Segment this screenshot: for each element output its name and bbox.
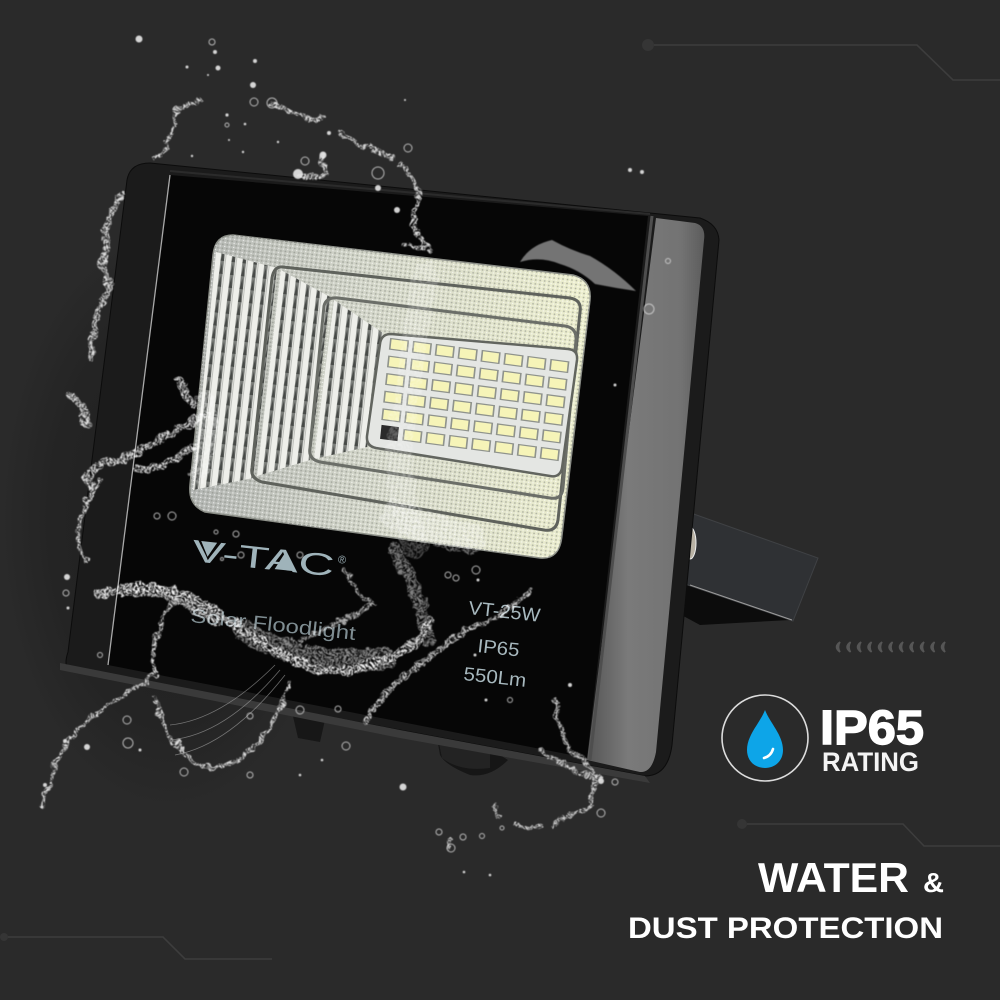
IP65 badge xyxy=(722,695,924,781)
circuit line: bottom left xyxy=(0,933,272,959)
floodlight mounting bracket xyxy=(676,512,818,625)
icon: water drop xyxy=(747,710,783,768)
heading: water: WATER xyxy=(758,854,909,901)
drop highlight xyxy=(764,749,773,758)
circuit line: top right xyxy=(642,39,1000,80)
water veil over reflector xyxy=(198,275,470,545)
cable plug under the body xyxy=(292,712,325,742)
IP65 label: IP65 xyxy=(820,702,924,755)
glass print: V-TAC logo xyxy=(190,533,347,585)
side strip xyxy=(587,218,704,772)
top rim xyxy=(170,171,650,214)
heading: water: & xyxy=(923,867,944,898)
floodlight body xyxy=(60,163,719,783)
outer housing xyxy=(66,163,719,776)
chevron row xyxy=(836,642,945,652)
glass print: rating: IP65 xyxy=(476,636,520,662)
LED grid xyxy=(380,339,569,462)
glass print: product name: Solar Floodlight xyxy=(189,605,358,645)
top and bottom facet texture xyxy=(190,235,590,558)
water splash: main lower sweep xyxy=(42,550,530,805)
glass right edge xyxy=(590,216,652,760)
bracket screw xyxy=(684,527,696,559)
reflector xyxy=(190,235,590,558)
bottom edge band xyxy=(60,663,650,783)
left facet inner xyxy=(314,300,383,459)
glass print: V-TAC logo: V-TAC xyxy=(190,533,336,583)
inner glass xyxy=(108,175,648,758)
left facet outer xyxy=(193,252,277,490)
water splash: lower right dribble xyxy=(446,700,600,850)
cable gland under the body xyxy=(437,738,508,775)
LED board xyxy=(367,334,577,476)
glass left highlight xyxy=(108,175,170,665)
water splash: upper left edge xyxy=(91,195,122,358)
RATING label: RATING xyxy=(822,747,919,777)
badge ring xyxy=(722,695,808,781)
drop shadow behind floodlight xyxy=(0,230,340,810)
glass print: V-TAC logo: ® xyxy=(337,554,347,567)
heading: dust protection: DUST PROTECTION xyxy=(628,912,943,945)
circuit line: middle right xyxy=(737,819,1000,846)
water droplets xyxy=(43,36,670,876)
water splash: left arc over frame xyxy=(70,380,205,560)
ring grooves xyxy=(252,267,580,530)
left facet middle xyxy=(257,270,330,476)
glass print: lumens: 550Lm xyxy=(462,664,527,692)
glass print: model: VT-25W xyxy=(467,598,541,627)
water splash: top chains xyxy=(155,100,430,250)
water splash: top right of reflector xyxy=(520,240,636,291)
